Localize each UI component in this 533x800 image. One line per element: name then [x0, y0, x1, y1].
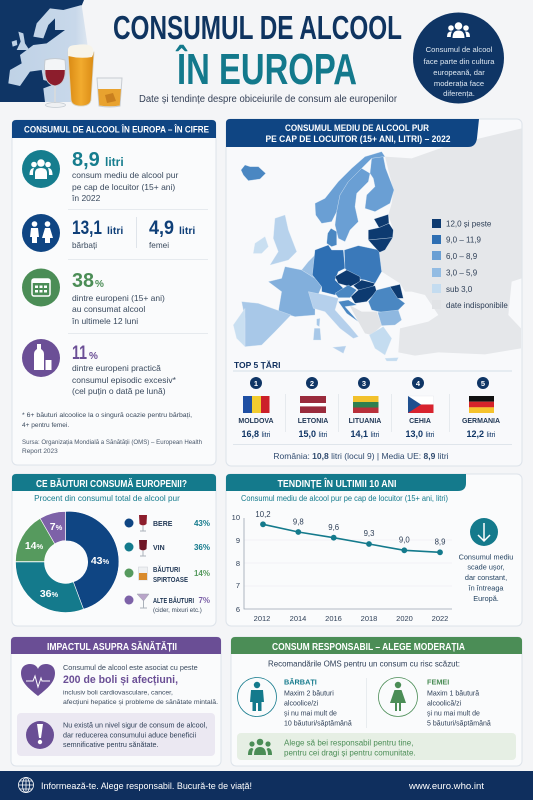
source: Sursa: Organizația Mondială a Sănătății (OMS) – European Health [22, 439, 202, 446]
line chart: 2018 [361, 614, 377, 623]
callout: culture circle: europeană, dar [433, 68, 485, 77]
stat: binge drinking: % [89, 351, 98, 362]
line chart: 10 [232, 513, 240, 522]
country: Lithuania: 14,1 litri [351, 429, 380, 439]
stat: binge drinking: consumul episodic excesiv* [72, 375, 177, 385]
icon: heart [21, 664, 55, 696]
line chart: 6 [236, 605, 240, 614]
heading: top 5: TOP 5 ȚĂRI [234, 360, 280, 370]
callout: choose responsibly: pentru cei dragi și pentru comunitate. [284, 748, 416, 758]
text: diseases: inclusiv boli cardiovasculare, cancer, [63, 690, 173, 696]
icon: whisky glass [97, 78, 122, 107]
subtitle: drinks: Procent din consumul total de alcool pur [34, 494, 180, 503]
legend: other: ALTE BĂUTURI [153, 596, 194, 605]
title: ÎN EUROPA [176, 44, 357, 94]
country: Czechia: 13,0 litri [406, 429, 435, 439]
men recommendation: BĂRBAȚI [284, 678, 317, 686]
legend: 3,0 – 5,9 [446, 268, 478, 278]
donut chart [15, 511, 119, 613]
stat: men and women: bărbați [72, 241, 97, 250]
heading: trend [226, 474, 466, 491]
country: Lithuania [349, 377, 381, 439]
men recommendation: și nu mai mult de [284, 710, 337, 718]
heading: health: IMPACTUL ASUPRA SĂNĂTĂȚII [47, 640, 177, 653]
panel: responsible [231, 637, 522, 766]
country: Latvia: 2 [310, 379, 314, 388]
line chart: 8 [236, 559, 240, 568]
heading: map: PE CAP DE LOCUITOR (15+ ANI, LITRI) – 2022 [266, 134, 451, 144]
stat: men and women [22, 214, 195, 252]
stat: average: consum mediu de alcool pur [72, 170, 178, 180]
heading: trend: TENDINȚE ÎN ULTIMII 10 ANI [278, 477, 397, 490]
footer: Informează-te. Alege responsabil. Bucură-te de viață! [41, 781, 252, 792]
line chart: 2020 [396, 614, 413, 623]
text: diseases: 200 de boli și afecțiuni, [63, 674, 178, 686]
heading: responsible: CONSUM RESPONSABIL – ALEGE MODERAȚIA [272, 642, 465, 653]
legend: beer: BERE [153, 521, 173, 528]
stat: binge drinking: dintre europeni practică [72, 363, 161, 373]
donut chart: 36% [40, 588, 59, 600]
stat: men and women: 4,9 [149, 218, 174, 239]
women recommendation: și nu mai mult de [427, 710, 480, 718]
donut chart: 14% [25, 540, 44, 552]
legend: 12,0 și peste [446, 220, 492, 228]
callout: trend note: în întreaga [468, 584, 504, 592]
heading: map: CONSUMUL MEDIU DE ALCOOL PUR [285, 123, 430, 133]
line chart: 9 [236, 536, 240, 545]
legend: spirits [124, 565, 210, 584]
women recommendation: FEMEI [427, 678, 449, 686]
stat: average [22, 149, 178, 203]
source [22, 439, 202, 455]
legend: wine: 36% [194, 543, 210, 552]
title [113, 9, 402, 94]
stat: average: litri [105, 155, 124, 169]
note: Romania and EU average: România: 10,8 litri (locul 9) | Media UE: 8,9 litri [273, 451, 449, 461]
country: Czechia: CEHIA [409, 418, 431, 425]
subtitle: responsible: Recomandările OMS pentru un consum cu risc scăzut: [268, 660, 460, 668]
legend: other [124, 594, 210, 614]
source: Report 2023 [22, 448, 58, 455]
legend: other: (cider, mixuri etc.) [153, 607, 202, 614]
callout: trend note [459, 552, 513, 603]
heading: drinks: CE BĂUTURI CONSUMĂ EUROPENII? [36, 477, 187, 490]
stat: men and women: litri [107, 225, 123, 237]
icon: people [447, 22, 470, 38]
donut chart: 43% [91, 555, 110, 567]
stat: binge drinking: (cel puțin o dată pe lună) [72, 386, 166, 396]
icon: down arrow [470, 518, 498, 546]
heading: health [11, 637, 221, 654]
callout: no safe level: Nu există un nivel sigur de consum de alcool, [63, 720, 207, 730]
panel: stats [12, 120, 216, 465]
legend [432, 219, 508, 310]
country: Latvia: LETONIA [298, 418, 328, 425]
country: Czechia: 4 [416, 379, 421, 388]
line chart [232, 510, 452, 623]
country: Moldova: 1 [254, 379, 258, 388]
stat: drinkers share: % [95, 279, 104, 290]
line chart: 2012 [254, 614, 270, 623]
callout: trend note: scade ușor, [467, 562, 505, 572]
title: CONSUMUL DE ALCOOL [113, 9, 402, 46]
heading: map [226, 119, 479, 147]
callout: trend note: dar constant, [465, 573, 507, 582]
stat: drinkers share: în ultimele 12 luni [71, 316, 138, 326]
country: Latvia: 15,0 litri [299, 429, 328, 439]
women recommendation: alcoolică/zi [427, 700, 462, 708]
heading: drinks [12, 474, 216, 491]
map of Europe [233, 128, 522, 361]
footer [0, 771, 533, 800]
legend: sub 3,0 [446, 285, 473, 294]
country: Czechia [406, 377, 435, 439]
callout: choose responsibly [237, 733, 516, 760]
callout: culture circle: face parte din cultura [424, 57, 495, 66]
country: Moldova: MOLDOVA [238, 418, 274, 425]
men recommendation: 10 băuturi/săptămână [284, 720, 352, 728]
women recommendation [378, 678, 491, 728]
stat: drinkers share: dintre europeni (15+ ani) [72, 293, 165, 303]
legend: 6,0 – 8,9 [446, 252, 478, 261]
subtitle: Date și tendințe despre obiceiurile de consum ale europenilor [139, 94, 398, 105]
line chart: 2022 [432, 614, 448, 623]
callout: culture circle: moderația face [434, 79, 484, 88]
country: Germany: 12,2 litri [467, 429, 496, 439]
men recommendation: alcoolice/zi [284, 700, 319, 708]
country: Lithuania: LITUANIA [349, 418, 381, 425]
stat: binge drinking [22, 339, 177, 396]
callout: trend note: Consumul mediu [459, 552, 513, 562]
line chart: 2016 [325, 614, 342, 623]
stat: drinkers share: 38 [72, 270, 94, 292]
stat: average: în 2022 [71, 193, 101, 203]
country: Latvia [298, 377, 328, 439]
stat: binge drinking: 11 [72, 343, 87, 364]
men recommendation: Maxim 2 băuturi [284, 690, 334, 698]
footnote: * 6+ băuturi alcoolice la o singură ocazie pentru bărbați, [22, 412, 192, 419]
legend: date indisponibile [446, 301, 508, 310]
footnote: 4+ pentru femei. [22, 422, 69, 429]
icon: wine glass [44, 58, 66, 108]
country: Germany: GERMANIA [462, 418, 500, 425]
heading: responsible [231, 637, 522, 654]
women recommendation: Maxim 1 băutură [427, 690, 479, 698]
stat: men and women: 13,1 [72, 218, 102, 239]
stat: drinkers share [22, 268, 165, 326]
stat: men and women: litri [179, 225, 195, 237]
country: Lithuania: 3 [362, 379, 366, 388]
line chart: 9,8 [293, 518, 304, 526]
heading: stats: CONSUMUL DE ALCOOL ÎN EUROPA – ÎN CIFRE [24, 124, 209, 134]
text: diseases [63, 663, 218, 706]
men recommendation [238, 678, 352, 728]
panel: drinks [12, 474, 216, 626]
women recommendation: 5 băuturi/săptămână [427, 720, 491, 728]
callout: trend note: Europă. [473, 594, 499, 603]
subtitle: trend: Consumul mediu de alcool pur pe cap de locuitor (15+ ani, litri) [241, 494, 448, 503]
country: Germany: 5 [481, 379, 485, 388]
country: Germany [462, 377, 500, 439]
panel: health [11, 637, 221, 766]
icon: globe [18, 778, 34, 792]
line chart: 9,6 [328, 523, 339, 532]
legend: spirits: SPIRTOASE [153, 577, 188, 584]
legend: beer [124, 515, 210, 532]
callout: culture circle: Consumul de alcool [426, 45, 493, 54]
footnote [22, 412, 192, 429]
heading: stats [12, 120, 216, 138]
line chart: 2014 [290, 614, 306, 623]
legend: wine [124, 540, 210, 556]
line chart: 9,3 [364, 529, 374, 538]
callout: culture circle [413, 12, 504, 104]
stat: average: 8,9 [72, 149, 100, 171]
line chart: 10,2 [255, 510, 271, 519]
callout: choose responsibly: Alege să bei responsabil pentru tine, [284, 738, 413, 748]
stat: drinkers share: au consumat alcool [72, 304, 145, 314]
country: Moldova [238, 377, 274, 439]
country: Moldova: 16,8 litri [242, 429, 271, 439]
legend: other: 7% [198, 596, 210, 605]
stat: average: pe cap de locuitor (15+ ani) [72, 182, 175, 192]
footer: www.euro.who.int [408, 781, 485, 791]
legend: 9,0 – 11,9 [446, 236, 482, 244]
panel: trend [226, 474, 522, 626]
text: diseases: Consumul de alcool este asociat cu peste [63, 663, 198, 672]
callout: no safe level [17, 713, 215, 756]
legend: beer: 43% [194, 519, 210, 528]
legend: spirits: 14% [194, 569, 210, 578]
legend: spirits: BĂUTURI [153, 565, 180, 574]
line chart: 7 [236, 581, 240, 590]
legend: wine: VIN [153, 545, 165, 552]
line chart: 9,0 [399, 536, 410, 544]
icon: beer glass [68, 44, 94, 106]
stat: men and women: femei [149, 241, 169, 250]
text: diseases: afecțiuni hepatice și probleme de sănătate mintală. [63, 699, 218, 706]
callout: culture circle: diferența. [443, 89, 475, 98]
line chart: 8,9 [435, 538, 445, 546]
decorative Europe map corner [0, 0, 87, 102]
callout: no safe level: semnificative pentru sănătate. [63, 740, 158, 749]
donut chart: 7% [50, 521, 63, 533]
panel: map [226, 119, 522, 466]
callout: no safe level: dar reducerea consumului aduce beneficii [63, 730, 196, 740]
